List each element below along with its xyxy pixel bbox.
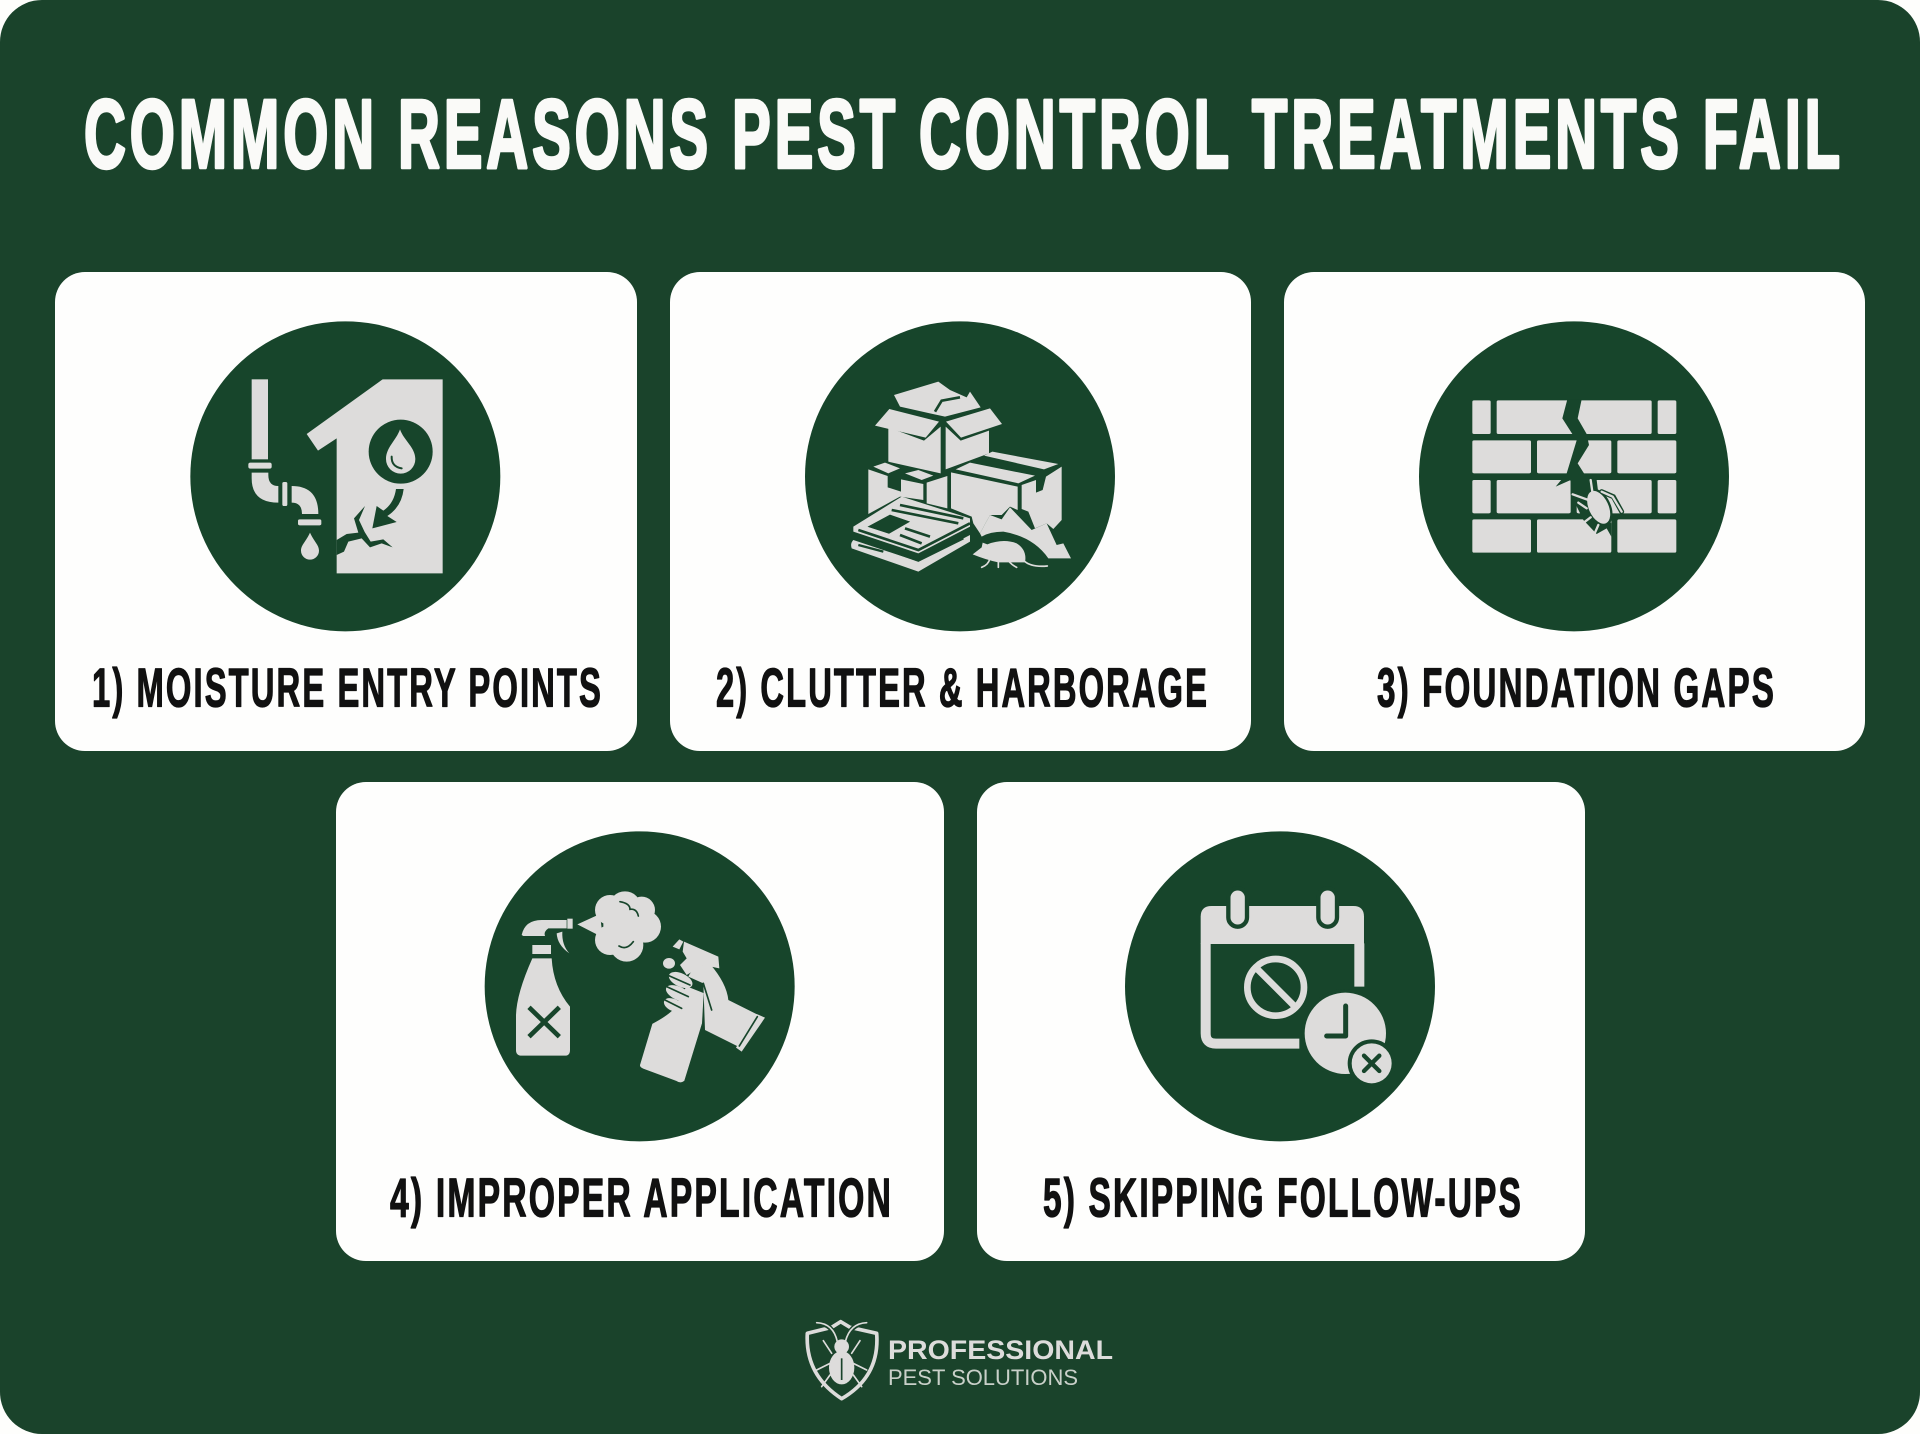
icon: clutter	[805, 321, 1115, 631]
label: 5) SKIPPING FOLLOW-UPS	[1043, 1166, 1523, 1228]
logo text: pest solutions: PEST SOLUTIONS	[888, 1365, 1078, 1390]
icon: moisture	[190, 321, 500, 631]
label: 1) MOISTURE ENTRY POINTS	[92, 656, 603, 718]
label: 4) IMPROPER APPLICATION	[390, 1166, 893, 1228]
panel: improper application	[336, 782, 944, 1261]
panel: skipping follow-ups	[977, 782, 1585, 1261]
panel: foundation gaps	[1284, 272, 1865, 751]
icon: brick wall	[1419, 321, 1729, 631]
panel: clutter and harborage	[670, 272, 1251, 751]
icon: shield with beetle	[807, 1322, 877, 1399]
panel: moisture entry points	[55, 272, 637, 751]
icon: spray bottles	[485, 831, 795, 1141]
logo text: professional: PROFESSIONAL	[888, 1335, 1113, 1365]
logo	[807, 1322, 1113, 1399]
icon: calendar and clock	[1125, 831, 1435, 1141]
label: 2) CLUTTER & HARBORAGE	[716, 656, 1209, 718]
